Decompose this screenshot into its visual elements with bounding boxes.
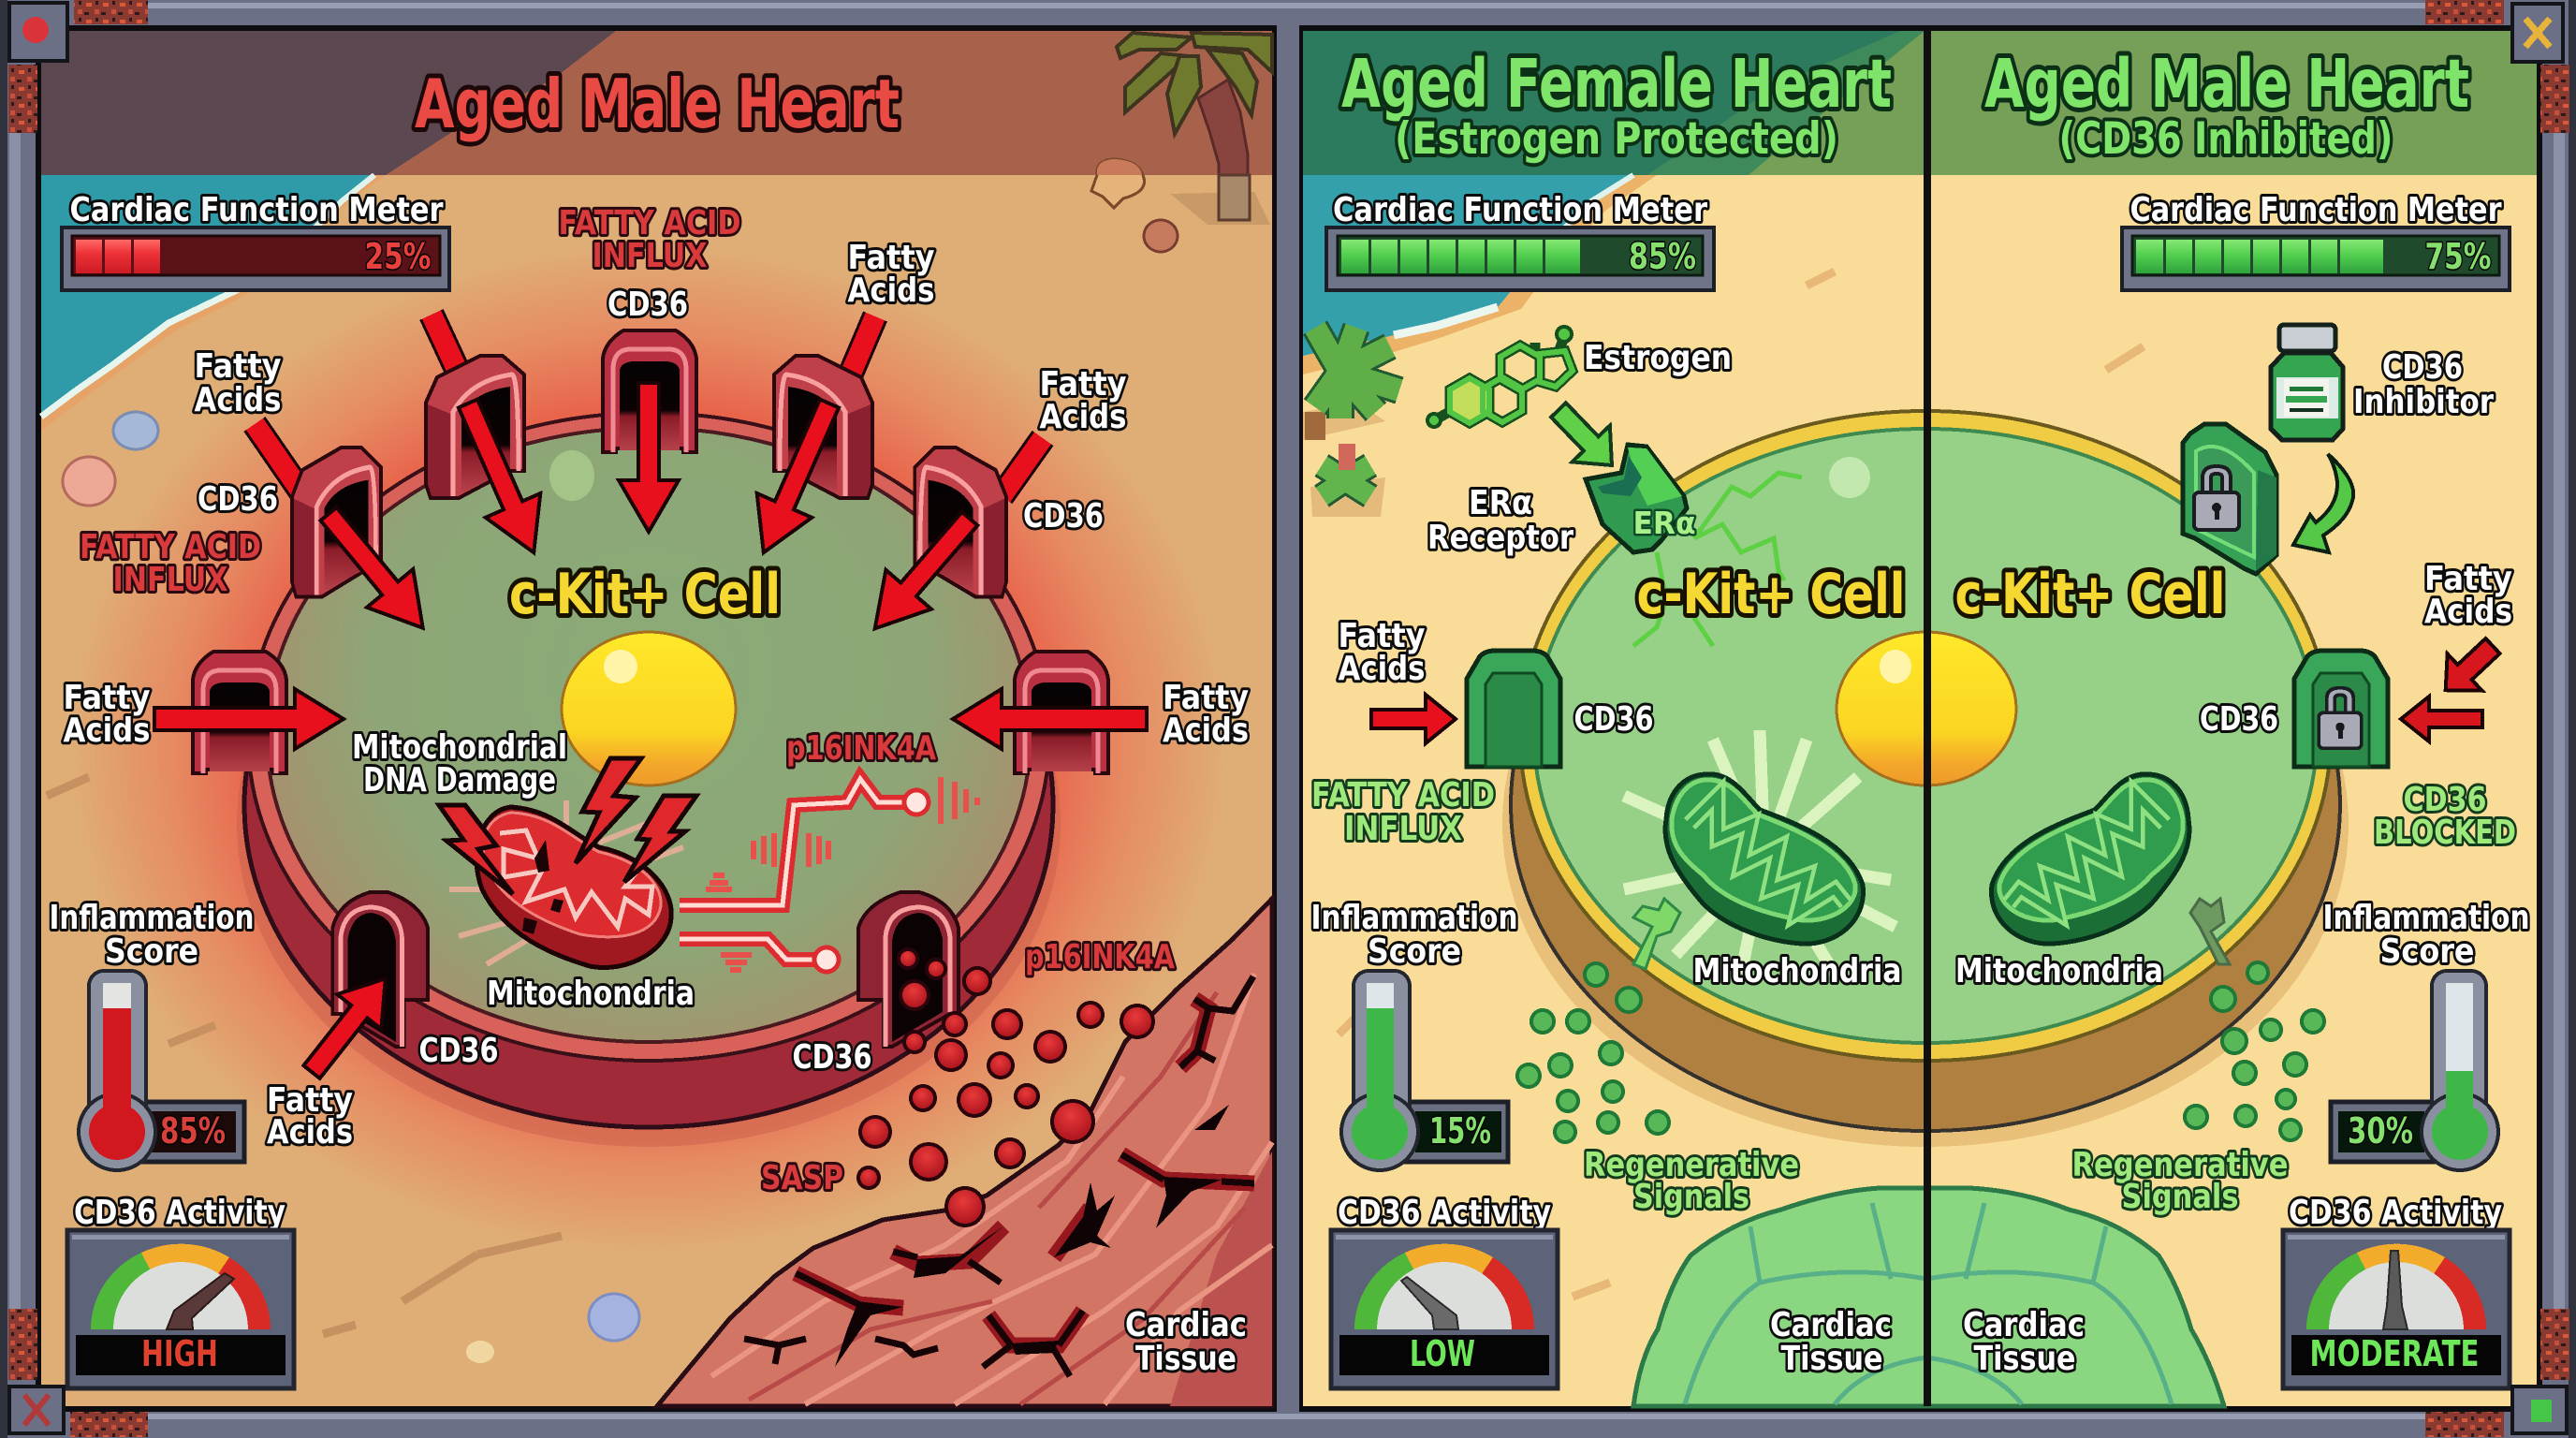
button: bottom left bbox=[9, 1387, 64, 1433]
button: bottom right bbox=[2512, 1387, 2567, 1433]
palm tree bbox=[1117, 33, 1272, 225]
label: mitochondrial DNA damage bbox=[352, 728, 567, 800]
ER alpha receptor: ERα bbox=[1632, 505, 1696, 541]
label: regenerative signals female: Regenerative bbox=[1584, 1146, 1799, 1184]
label: fatty acids far right: Fatty bbox=[1039, 365, 1127, 404]
label: p16INK4A inside cell: p16INK4A bbox=[786, 729, 936, 768]
label: c-Kit+ cell female: c-Kit+ Cell bbox=[1636, 562, 1906, 627]
bush bbox=[1310, 444, 1385, 517]
background: glowing sand bbox=[41, 31, 1272, 1406]
arrow: far right influx bbox=[852, 499, 992, 648]
label: ER alpha receptor: Receptor bbox=[1427, 519, 1573, 557]
label: fatty acids far right bbox=[1039, 365, 1127, 436]
label: fatty acids mid left: Fatty bbox=[64, 679, 150, 717]
label: fatty acids top right: Fatty bbox=[848, 239, 934, 277]
label: CD36 blocked bbox=[2374, 781, 2516, 852]
label: fatty acids mid right: Acids bbox=[1163, 712, 1249, 750]
label: ER alpha receptor bbox=[1427, 484, 1573, 557]
palm plant bbox=[1303, 328, 1399, 440]
label: fatty acids lower: Fatty bbox=[267, 1081, 353, 1120]
nucleus bbox=[1837, 632, 2016, 785]
label: cardiac tissue bbox=[1125, 1306, 1247, 1378]
label: fatty acid influx female bbox=[1311, 776, 1495, 848]
glow rays: female mitochondrion bbox=[1624, 730, 1895, 974]
panel: protected hearts bbox=[1303, 31, 2537, 1406]
male CD36 activity gauge: moderate bbox=[2283, 1194, 2510, 1388]
CD36 channel: top bbox=[603, 330, 696, 452]
female inflammation score: 15% bbox=[1310, 899, 1518, 1170]
label: cardiac tissue: Cardiac bbox=[1125, 1306, 1247, 1344]
label: cardiac tissue: Tissue bbox=[1135, 1340, 1237, 1378]
label: CD36 female: CD36 bbox=[1574, 700, 1653, 739]
sprout: female bbox=[1633, 899, 1680, 969]
female cardiac function meter: 85%: Cardiac Function Meter bbox=[1333, 191, 1707, 229]
male CD36 activity gauge: moderate: CD36 Activity bbox=[2289, 1194, 2502, 1232]
label: fatty acids far left: Fatty bbox=[195, 347, 281, 386]
arrow tails behind receptors bbox=[255, 315, 1043, 496]
title: aged female heart bbox=[1341, 45, 1892, 165]
male cardiac function meter: 75% bbox=[2122, 191, 2510, 290]
inflammation score: 85%: 85% bbox=[160, 1110, 226, 1152]
label: fatty acids female: Fatty bbox=[1339, 617, 1425, 655]
label: fatty acids mid left bbox=[64, 679, 150, 750]
button: top left bbox=[9, 3, 67, 61]
title: Aged Male Heart bbox=[415, 65, 900, 143]
label: fatty acid influx top: FATTY ACID bbox=[558, 204, 741, 242]
label: fatty acid influx top bbox=[558, 204, 741, 275]
pink shell bbox=[63, 457, 115, 506]
title: aged female heart: Aged Female Heart bbox=[1341, 45, 1892, 123]
label: cardiac tissue male: Cardiac bbox=[1963, 1306, 2085, 1344]
arrow: fatty acids male diagonal bbox=[2428, 627, 2510, 709]
label: mitochondria: Mitochondria bbox=[487, 975, 695, 1013]
label: CD36 male: CD36 bbox=[2200, 700, 2278, 739]
title: aged female heart: (Estrogen Protected) bbox=[1395, 113, 1838, 165]
label: fatty acids mid right: Fatty bbox=[1163, 679, 1249, 717]
cardiac function meter: 25% bbox=[62, 191, 449, 290]
CD36 channel: far left bbox=[292, 448, 381, 597]
CD36 activity gauge: high: CD36 Activity bbox=[74, 1194, 285, 1232]
cardiac tissue (healthy) bbox=[1633, 1188, 2224, 1406]
cardiac function meter: 25%: 25% bbox=[365, 236, 431, 277]
female cardiac function meter: 85% bbox=[1326, 191, 1714, 290]
cardiac function meter: 25%: Cardiac Function Meter bbox=[69, 191, 444, 229]
label: mitochondrial DNA damage: DNA Damage bbox=[363, 761, 556, 800]
sea bbox=[41, 175, 386, 431]
label: fatty acids top right: Acids bbox=[848, 271, 934, 310]
label: fatty acid influx female: FATTY ACID bbox=[1311, 776, 1495, 814]
header band bbox=[1303, 31, 2537, 175]
vesicle bbox=[1829, 457, 1870, 498]
arrow: top influx bbox=[619, 383, 679, 532]
CD36 channel: mid right bbox=[1015, 652, 1108, 773]
arrow: mid left influx bbox=[154, 689, 344, 749]
label: mitochondrial DNA damage: Mitochondrial bbox=[352, 728, 567, 767]
CD36 channel: upper left bbox=[426, 356, 524, 498]
label: fatty acids male: Fatty bbox=[2424, 560, 2512, 598]
blue rock bbox=[589, 1294, 639, 1341]
panel: aged male heart (untreated) bbox=[41, 31, 1272, 1406]
female CD36 activity gauge: low bbox=[1331, 1194, 1558, 1388]
title: aged male heart inhibited bbox=[1984, 45, 2469, 165]
label: fatty acids far left: Acids bbox=[195, 381, 281, 419]
label: CD36 left: CD36 bbox=[198, 480, 278, 519]
male cardiac function meter: 75%: Cardiac Function Meter bbox=[2130, 191, 2502, 229]
label: fatty acids lower: Acids bbox=[267, 1113, 353, 1152]
label: cardiac tissue female bbox=[1770, 1306, 1892, 1378]
label: fatty acids lower bbox=[267, 1081, 353, 1152]
activation sparks bbox=[1633, 473, 1802, 646]
female inflammation score: 15%: 15% bbox=[1429, 1110, 1491, 1152]
label: ER alpha receptor: ERα bbox=[1469, 484, 1532, 522]
CD36 channel: lower left bbox=[332, 892, 428, 1047]
header band bbox=[41, 31, 1272, 175]
inflammation score: 85%: Score bbox=[105, 932, 198, 971]
label: fatty acids male bbox=[2424, 560, 2512, 631]
cardiac tissue (damaged) bbox=[657, 899, 1272, 1406]
male inflammation score: 30%: Score bbox=[2379, 932, 2475, 971]
label: fatty acid influx female: INFLUX bbox=[1344, 810, 1462, 848]
sprout: male bbox=[2190, 899, 2230, 964]
divider between female and male bbox=[1924, 31, 1931, 1406]
nucleus bbox=[562, 632, 736, 785]
CD36 channel: mid left bbox=[193, 652, 286, 773]
label: CD36 lower right: CD36 bbox=[792, 1038, 872, 1077]
arrow: far left influx bbox=[305, 495, 446, 647]
cell dish (c-Kit+ cell) bbox=[237, 413, 1061, 1147]
SASP particles bbox=[858, 949, 1153, 1225]
label: fatty acid influx left: INFLUX bbox=[112, 561, 228, 599]
CD36 channel: upper right bbox=[774, 356, 872, 498]
label: cardiac tissue female: Tissue bbox=[1780, 1340, 1883, 1378]
label: fatty acids far right: Acids bbox=[1039, 398, 1127, 436]
female cardiac function meter: 85%: 85% bbox=[1629, 236, 1696, 277]
CD36 channel: female (open) bbox=[1467, 651, 1560, 767]
vesicle bbox=[549, 450, 594, 501]
label: CD36 right: CD36 bbox=[1023, 497, 1104, 536]
label: fatty acids mid right bbox=[1163, 679, 1249, 750]
female CD36 activity gauge: low: LOW bbox=[1410, 1333, 1475, 1374]
arrow: fatty acids female bbox=[1371, 695, 1456, 743]
label: CD36 inhibitor bbox=[2353, 348, 2494, 421]
sea bbox=[1303, 175, 1657, 374]
regenerative signals: female bbox=[1517, 963, 1669, 1142]
label: mitochondria female: Mitochondria bbox=[1692, 952, 1902, 990]
label: regenerative signals male: Signals bbox=[2121, 1178, 2239, 1216]
arrow: mid right influx bbox=[953, 689, 1147, 749]
CD36 activity gauge: high: HIGH bbox=[141, 1333, 218, 1374]
estrogen molecule bbox=[1427, 327, 1573, 427]
male inflammation score: 30% bbox=[2323, 899, 2529, 1170]
label: fatty acids far left bbox=[195, 347, 281, 419]
shell bbox=[466, 1341, 494, 1363]
regenerative signals: male bbox=[2185, 962, 2324, 1140]
label: cardiac tissue female: Cardiac bbox=[1770, 1306, 1892, 1344]
CD36 inhibitor bottle bbox=[2271, 325, 2343, 440]
label: CD36 top: CD36 bbox=[607, 286, 688, 324]
male cardiac function meter: 75%: 75% bbox=[2424, 236, 2492, 277]
label: p16INK4A outside cell: p16INK4A bbox=[1025, 938, 1175, 976]
blue rock bbox=[113, 412, 158, 449]
label: regenerative signals female bbox=[1584, 1146, 1799, 1216]
label: regenerative signals male: Regenerative bbox=[2072, 1146, 2288, 1184]
label: fatty acid influx left bbox=[80, 528, 261, 599]
label: fatty acids male: Acids bbox=[2424, 593, 2512, 631]
inflammation score: 85%: Inflammation bbox=[49, 899, 255, 937]
p16INK4A signal pathway bbox=[680, 777, 977, 972]
label: fatty acids female: Acids bbox=[1339, 650, 1425, 688]
label: regenerative signals female: Signals bbox=[1633, 1178, 1749, 1216]
male CD36 activity gauge: moderate: MODERATE bbox=[2310, 1333, 2479, 1374]
label: fatty acid influx top: INFLUX bbox=[592, 237, 708, 275]
background sand bbox=[1303, 31, 2537, 1406]
label: mitochondria male: Mitochondria bbox=[1955, 952, 2163, 990]
damaged mitochondrion bbox=[449, 800, 683, 967]
label: SASP: SASP bbox=[761, 1159, 843, 1197]
title: aged male heart inhibited: (CD36 Inhibited) bbox=[2059, 113, 2393, 165]
label: CD36 inhibitor: Inhibitor bbox=[2353, 383, 2494, 421]
label: c-Kit+ cell male: c-Kit+ Cell bbox=[1954, 562, 2226, 627]
label: fatty acids top right bbox=[848, 239, 934, 310]
cell dish left half (female) and right half (male) bbox=[1502, 411, 2349, 1147]
button: close bbox=[2512, 4, 2563, 62]
sand marks bbox=[1339, 271, 2509, 1297]
shell bbox=[1091, 159, 1145, 208]
mitochondrion: female bbox=[1665, 774, 1863, 944]
curved arrow: inhibitor to CD36 bbox=[2293, 454, 2353, 552]
female CD36 activity gauge: low: CD36 Activity bbox=[1338, 1194, 1551, 1232]
shell bbox=[1144, 220, 1178, 252]
female inflammation score: 15%: Inflammation bbox=[1310, 899, 1518, 937]
CD36 channel: far right bbox=[915, 448, 1006, 597]
ER alpha receptor bbox=[1586, 445, 1696, 552]
sand marks bbox=[47, 777, 562, 1334]
CD36 activity gauge: high bbox=[67, 1194, 294, 1388]
label: cardiac tissue male: Tissue bbox=[1973, 1340, 2076, 1378]
inflammation score: 85% bbox=[49, 899, 255, 1170]
arrow: estrogen to receptor bbox=[1540, 392, 1631, 483]
mitochondrion: male bbox=[1992, 774, 2189, 944]
label: fatty acids female bbox=[1339, 617, 1425, 688]
label: regenerative signals male bbox=[2072, 1146, 2288, 1216]
label: c-Kit+ cell: c-Kit+ Cell bbox=[509, 562, 781, 627]
arrow: upper right influx bbox=[737, 391, 856, 565]
label: estrogen: Estrogen bbox=[1584, 339, 1732, 377]
CD36 channel: male (locked top) bbox=[2183, 424, 2276, 574]
arrow: fatty acids male bbox=[2401, 697, 2482, 741]
label: CD36 blocked: BLOCKED bbox=[2374, 814, 2516, 852]
label: fatty acid influx left: FATTY ACID bbox=[80, 528, 261, 566]
arrow: lower left influx bbox=[289, 961, 407, 1090]
label: CD36 inhibitor: CD36 bbox=[2382, 348, 2463, 387]
label: CD36 lower left: CD36 bbox=[419, 1032, 498, 1070]
lightning bolts bbox=[439, 758, 696, 894]
female inflammation score: 15%: Score bbox=[1368, 932, 1461, 971]
male inflammation score: 30%: Inflammation bbox=[2323, 899, 2529, 937]
CD36 channel: lower right bbox=[858, 892, 959, 1047]
male inflammation score: 30%: 30% bbox=[2348, 1110, 2413, 1152]
arrow: upper left influx bbox=[441, 391, 561, 565]
label: CD36 blocked: CD36 bbox=[2404, 781, 2486, 819]
label: fatty acids mid left: Acids bbox=[64, 712, 150, 750]
arrow tails fill bbox=[255, 315, 1043, 496]
label: cardiac tissue male bbox=[1963, 1306, 2085, 1378]
CD36 channel: male (locked side) bbox=[2294, 651, 2388, 767]
